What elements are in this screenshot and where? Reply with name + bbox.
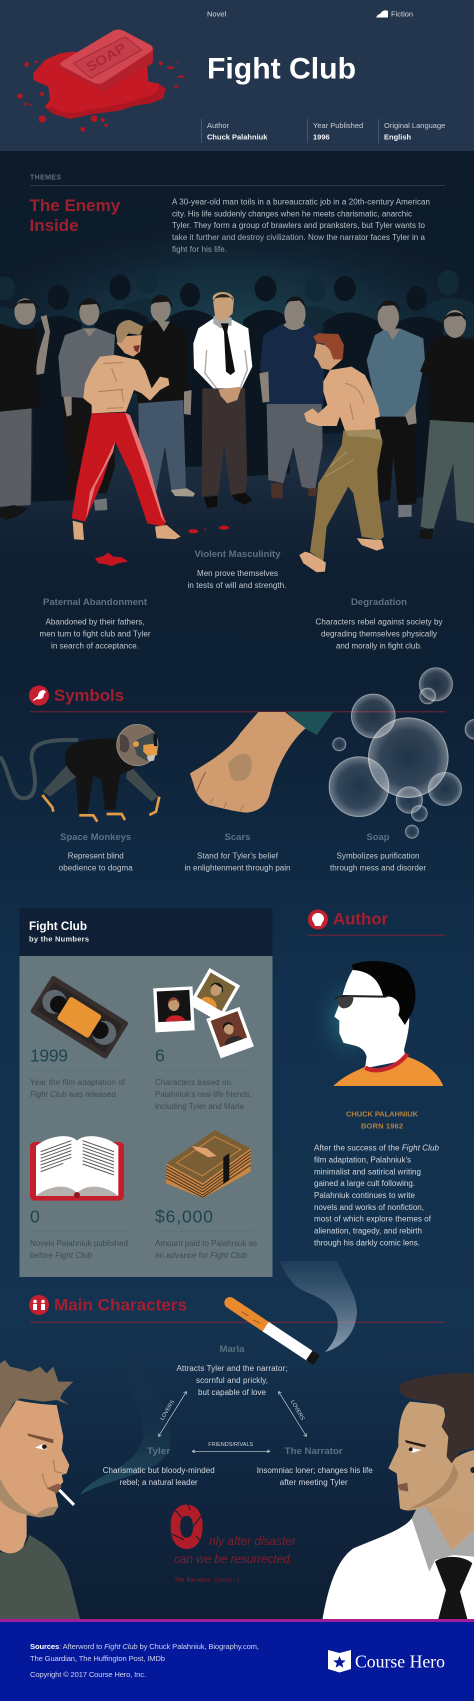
number: 6: Palahniuk's real-life friends, [155, 1090, 252, 1099]
icon: soap bubbles [329, 668, 474, 838]
icon: space monkey [0, 724, 159, 822]
author name [346, 1110, 419, 1130]
crowd man far left [0, 298, 50, 520]
symbol: space monkeys: Space Monkeys [60, 832, 131, 842]
section: symbols [0, 668, 474, 873]
number: 0 [30, 1206, 128, 1260]
character: tyler: Tyler [147, 1446, 171, 1456]
themes label: THEMES [30, 174, 61, 182]
meta: original language [378, 119, 445, 143]
panel heading [20, 908, 272, 956]
themes intro [30, 174, 445, 254]
crowd man far right [419, 310, 474, 539]
theme: paternal abandonment: men turn to fight club and Tyler [40, 630, 151, 638]
illustration: cigarette [230, 1303, 317, 1360]
theme: violent masculinity [188, 549, 286, 590]
number: 1999 [30, 1046, 126, 1099]
theme: paternal abandonment: in search of acceptance. [51, 642, 139, 650]
theme: degradation [316, 597, 442, 650]
character: tyler: Charismatic but bloody-minded [103, 1466, 215, 1475]
theme description: Tyler. They form a group of brawlers and pranksters, but Tyler wants to [172, 221, 426, 230]
faint back crowd [0, 268, 474, 337]
symbol: scars: in enlightenment through pain [184, 864, 290, 873]
author biography: most of which explore themes of [314, 1215, 432, 1224]
meta: year published [307, 119, 363, 143]
number: 6: 6 [155, 1046, 165, 1066]
author biography [314, 1144, 440, 1247]
theme title: The Enemy [30, 196, 121, 215]
symbol: soap [330, 832, 426, 873]
theme: violent masculinity: Men prove themselves [197, 569, 278, 578]
theme: violent masculinity: Violent Masculinity [194, 549, 280, 559]
icon: bird [29, 686, 49, 706]
theme title: Inside [30, 216, 79, 235]
fighter with red pants [72, 320, 181, 540]
symbol: soap: Soap [366, 832, 390, 842]
meta: original language: English [384, 132, 412, 142]
illustration: fight club crowd [0, 225, 474, 572]
icon: soap in blood [17, 29, 185, 132]
illustration: cigarette smoke [280, 1261, 357, 1352]
author biography: After the success of the Fight Club [314, 1144, 440, 1153]
icon: open book [30, 1136, 124, 1201]
meta: year published: 1996 [313, 132, 330, 142]
symbol: soap: Symbolizes purification [336, 852, 420, 861]
number: 0: 0 [30, 1206, 40, 1226]
icon: author pin [308, 910, 328, 930]
crowd man black shirt [133, 295, 195, 497]
header panel [0, 0, 474, 151]
crowd man navy shirt [259, 296, 325, 498]
character: the narrator: The Narrator [285, 1446, 343, 1456]
theme: paternal abandonment [40, 597, 151, 650]
main characters heading: Main Characters [54, 1296, 187, 1315]
author biography: gained a large cult following. [314, 1179, 415, 1188]
sources: Sources: Afterword to Fight Club by Chuck Palahniuk, Biography.com, [30, 1642, 259, 1651]
illustration: tyler smoke [80, 1330, 170, 1495]
symbol: scars: Stand for Tyler's belief [197, 852, 279, 861]
quote text: nly after disaster [209, 1534, 297, 1548]
arrow: marla to tyler: LOVERS [160, 1399, 176, 1422]
sources [30, 1642, 259, 1679]
icon: vhs tape [30, 975, 129, 1060]
number: 1999: 1999 [30, 1046, 68, 1066]
panel heading: Fight Club [29, 921, 87, 933]
meta: author: Chuck Palahniuk [207, 132, 268, 142]
fighter with khaki pants [299, 333, 384, 572]
theme: degradation: Characters rebel against society by [316, 618, 442, 626]
arrow: friends and rivals: FRIENDS/RIVALS [208, 1442, 254, 1448]
theme description: take it further and destroy civilization. Now the narrator faces Tyler in a [172, 233, 426, 242]
symbol: space monkeys [59, 832, 133, 873]
crowd man blue shirt [367, 301, 425, 517]
crowd man grey shirt [58, 298, 115, 511]
logo: course hero [328, 1650, 445, 1672]
number: 0: Novels Palahniuk published [30, 1239, 128, 1248]
theme description: A 30-year-old man toils in a bureaucratic job in a 20th-century American [172, 198, 430, 206]
panel: fight club by the numbers [20, 908, 272, 1277]
arrow: marla to narrator: LOVERS [289, 1399, 305, 1422]
quote drop cap: O [171, 1497, 203, 1559]
number: 1999: Fight Club was released [30, 1090, 116, 1099]
character: the narrator [257, 1446, 373, 1487]
sources: The Guardian, The Huffington Post, IMDb [30, 1654, 165, 1663]
theme: degradation: degrading themselves physically [321, 630, 437, 638]
arrow: marla to tyler [158, 1392, 186, 1436]
number: $6,000: $6,000 [155, 1206, 213, 1226]
illustration: narrator portrait [323, 1373, 474, 1619]
character: marla [176, 1344, 288, 1397]
blood splatter [95, 526, 229, 566]
dark crowd silhouettes [32, 275, 443, 502]
author biography: film adaptation, Palahniuk's [314, 1156, 411, 1164]
theme: paternal abandonment: Paternal Abandonment [43, 597, 147, 607]
meta: year published: Year Published [313, 121, 363, 130]
theme description: fight for his life. [172, 245, 227, 254]
number: $6,000 [155, 1206, 257, 1260]
number: 6 [155, 1046, 255, 1111]
quote: can we be resurrected. [174, 1552, 293, 1566]
character: marla: Marla [220, 1344, 246, 1354]
symbols heading: Symbols [54, 686, 124, 705]
number: $6,000: an advance for Fight Club [155, 1251, 248, 1260]
quote [171, 1497, 297, 1584]
quote attribution: The Narrator, Chapter 6 [174, 1578, 240, 1584]
icon: author portrait [310, 961, 443, 1086]
section: author [308, 910, 445, 1247]
theme: paternal abandonment: Abandoned by their fathers, [46, 618, 144, 626]
theme: degradation: Degradation [351, 597, 407, 607]
author name: CHUCK PALAHNIUK [346, 1110, 419, 1118]
arrow: marla to narrator [278, 1392, 306, 1436]
symbol: scars [184, 832, 290, 873]
section: main characters [0, 1261, 474, 1619]
theme: degradation: and morally in fight club. [336, 642, 422, 650]
genre: novel: Novel [207, 10, 227, 18]
title: Fight Club [207, 52, 356, 86]
character: marla: but capable of love [198, 1388, 267, 1397]
author biography: novels and works of nonfiction, [314, 1203, 424, 1212]
theme: violent masculinity: in tests of will and strength. [188, 581, 286, 590]
author biography: through his darkly comic lens. [314, 1238, 420, 1247]
symbol: space monkeys: Represent blind [68, 852, 124, 861]
character: tyler: rebel; a natural leader [120, 1478, 198, 1487]
icon: stack of money [166, 1130, 251, 1198]
symbol: soap: through mess and disorder [330, 864, 426, 873]
meta: original language: Original Language [384, 121, 445, 130]
logo: course hero: Course Hero [355, 1652, 445, 1672]
author heading: Author [333, 910, 388, 928]
symbol: space monkeys: obedience to dogma [59, 864, 133, 873]
illustration: tyler portrait [0, 1360, 80, 1619]
man in white shirt [193, 292, 252, 508]
author biography: alienation, tragedy, and rebirth [314, 1226, 422, 1236]
author biography: minimalist and satirical writing [314, 1167, 421, 1176]
number: 1999: Year the film adaptation of [30, 1078, 126, 1087]
number: 0: before Fight Club [30, 1251, 93, 1260]
sources: Copyright © 2017 Course Hero, Inc. [30, 1670, 146, 1679]
author name: BORN 1962 [361, 1121, 403, 1130]
meta: author [201, 119, 268, 143]
icon: soap in blood: SOAP [84, 40, 129, 75]
character: tyler [103, 1446, 215, 1487]
icon: scarred fist [190, 712, 333, 813]
footer [0, 1619, 474, 1701]
arrow: friends and rivals [192, 1442, 270, 1453]
icon: people [29, 1295, 49, 1315]
character: the narrator: Insomniac loner; changes his life [257, 1466, 373, 1475]
genre: fiction: Fiction [391, 10, 413, 18]
icon: polaroid photos [153, 968, 254, 1058]
character: marla: scornful and prickly, [196, 1376, 268, 1385]
character: marla: Attracts Tyler and the narrator; [176, 1364, 288, 1373]
theme description: city. His life suddenly changes when he meets charismatic, anarchic [172, 209, 412, 218]
character: the narrator: after meeting Tyler [280, 1478, 348, 1487]
number: $6,000: Amount paid to Palahniuk as [155, 1239, 257, 1248]
number: 6: Characters based on [155, 1078, 231, 1087]
author biography: Palahniuk continues to write [314, 1191, 416, 1200]
icon: fiction [376, 10, 388, 18]
symbol: scars: Scars [224, 832, 250, 842]
number: 6: including Tyler and Marla [155, 1102, 245, 1111]
theme description [172, 198, 430, 254]
meta: author: Author [207, 121, 230, 130]
panel heading: by the Numbers [29, 934, 89, 944]
